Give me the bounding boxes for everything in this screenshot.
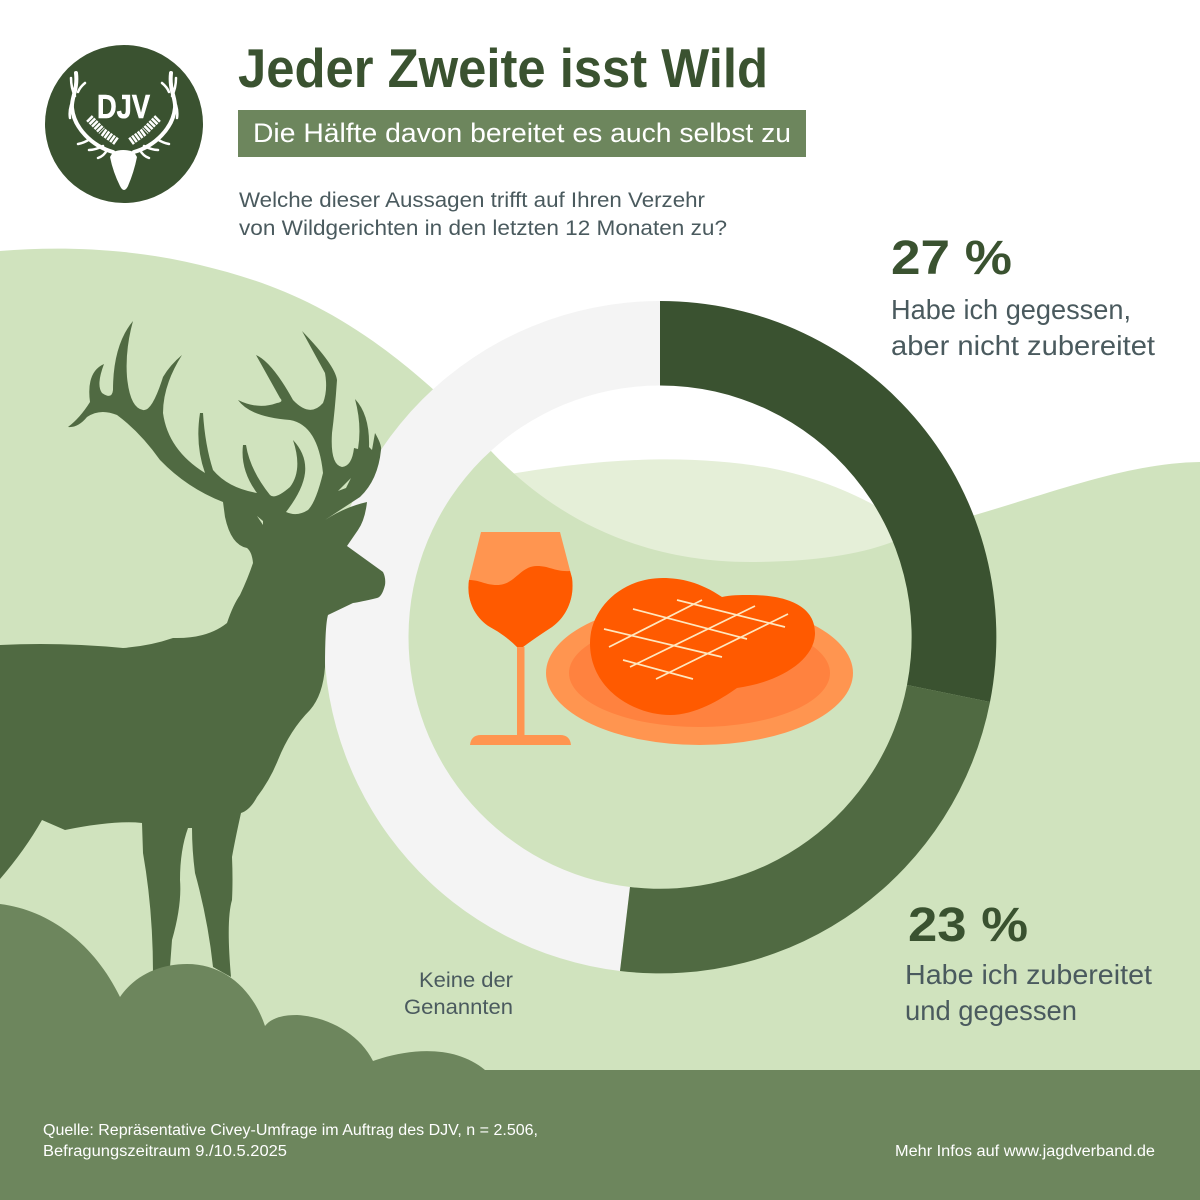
callout: 23 % [905,899,1152,1026]
website note: Mehr Infos auf www.jagdverband.de [895,1143,1155,1160]
stem [517,647,524,736]
donut chart [324,301,996,973]
logo wordmark: DJV [97,88,150,125]
antler gap [257,478,351,525]
icon: wine glass [468,532,573,745]
plate inner [569,619,830,727]
deer silhouette [0,321,385,977]
foot [470,735,571,745]
wine [468,566,573,648]
stag head [110,150,137,190]
label 27 %: Habe ich gegessen, [891,294,1131,325]
plate [546,601,853,745]
banner text: Die Hälfte davon bereitet es auch selbst zu [253,118,791,148]
source note: Quelle: Repräsentative Civey-Umfrage im Auftrag des DJV, n = 2.506, [43,1122,538,1139]
glass bowl [468,532,573,648]
banner background [238,110,806,157]
segment: 23 % prepared and eaten [620,685,990,973]
steak [590,578,815,715]
logo: DJV [45,45,203,203]
callout: 27 % [891,232,1155,361]
label: none of the above: Keine der [419,969,513,992]
label 27 %: aber nicht zubereitet [891,330,1155,361]
background hills [0,249,1200,1100]
subtitle banner [238,110,806,157]
label 23 % [905,959,1152,1026]
logo circle [45,45,203,203]
left antler [70,73,117,158]
segment: 27 % eaten, not prepared [660,301,996,702]
label: none of the above: Genannten [404,996,513,1019]
deer body and antlers [0,321,385,977]
label 23 %: Habe ich zubereitet [905,959,1152,990]
pale hill inside the ring [505,459,900,580]
label 27 % [891,294,1155,361]
value 27 %: 27 % [891,232,1012,285]
grill marks [604,600,788,679]
value 23 %: 23 % [908,899,1028,952]
source note: Befragungszeitraum 9./10.5.2025 [43,1143,287,1160]
foreground bushes and footer band [0,904,1200,1200]
title: Jeder Zweite isst Wild [238,37,768,99]
survey question [239,189,727,240]
label 23 %: und gegessen [905,995,1077,1026]
right antler [130,73,177,158]
source note [43,1122,538,1160]
survey question: Welche dieser Aussagen trifft auf Ihren Verzehr [239,189,705,212]
segment: none of the above [324,301,660,971]
icon: steak on plate [546,578,853,745]
survey question: von Wildgerichten in den letzten 12 Monaten zu? [239,217,727,240]
label: none of the above [404,969,513,1019]
